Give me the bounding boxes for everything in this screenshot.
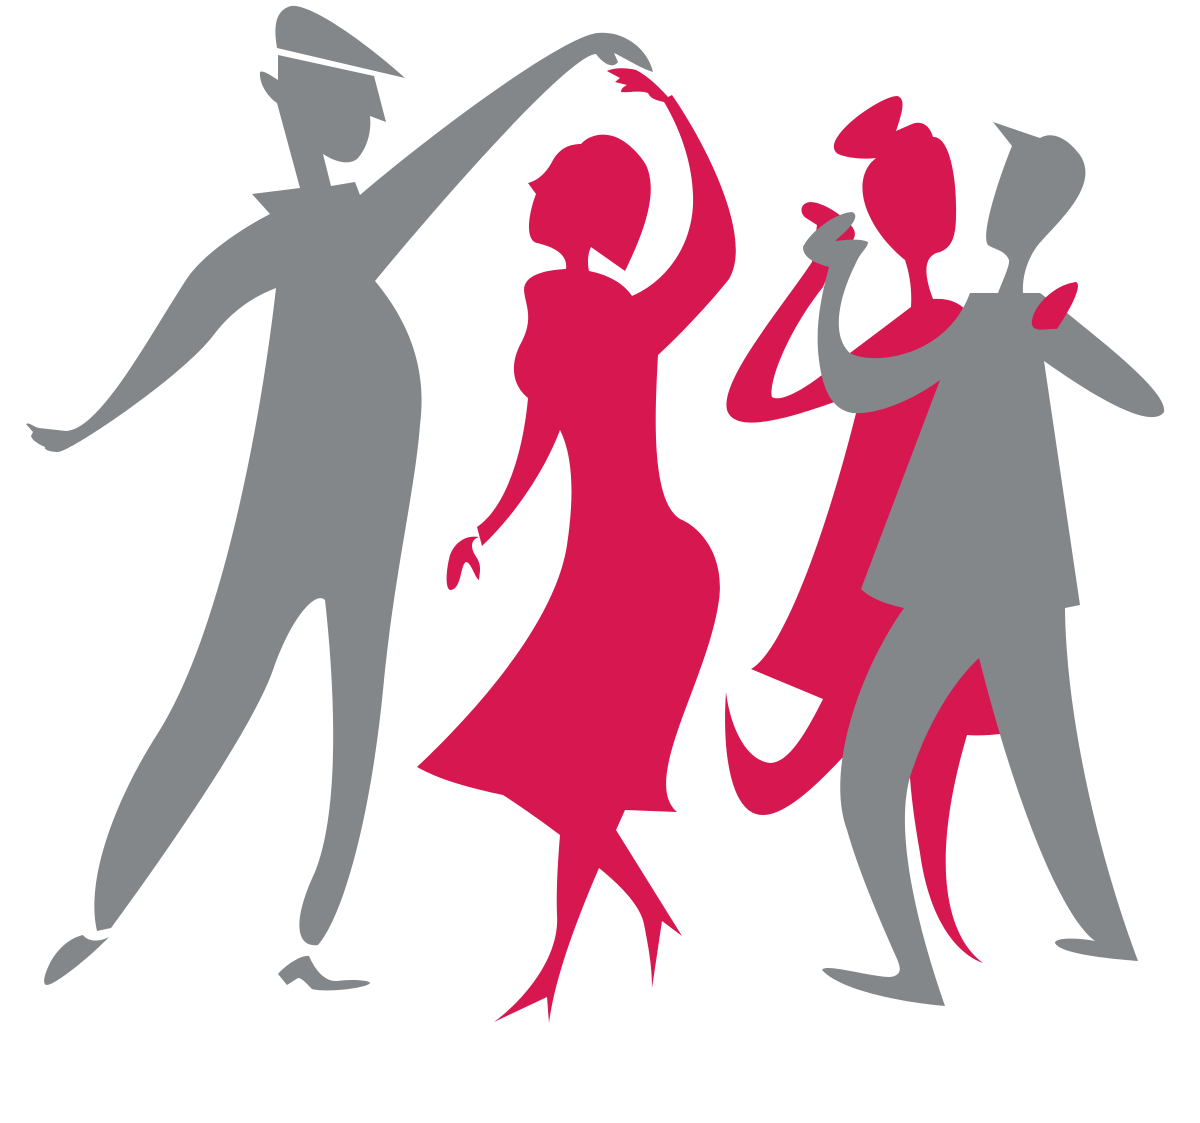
- crimson hand on shoulder: [1032, 282, 1078, 330]
- body: [803, 122, 1164, 1006]
- hand: [447, 537, 480, 590]
- arm and hand: [726, 202, 855, 423]
- right shoe: [278, 956, 370, 990]
- left shoe: [44, 935, 109, 985]
- figure: right man in gray: [803, 122, 1164, 1006]
- dress: [725, 370, 1010, 963]
- figure: right woman in crimson: [725, 96, 1010, 963]
- head and hat: [834, 96, 966, 400]
- figure: center woman in crimson: [417, 68, 736, 1023]
- body: [26, 33, 653, 945]
- figure: left man in gray: [26, 6, 653, 990]
- torso: [850, 307, 966, 410]
- body and dress: [417, 68, 736, 1023]
- hat: [275, 6, 405, 78]
